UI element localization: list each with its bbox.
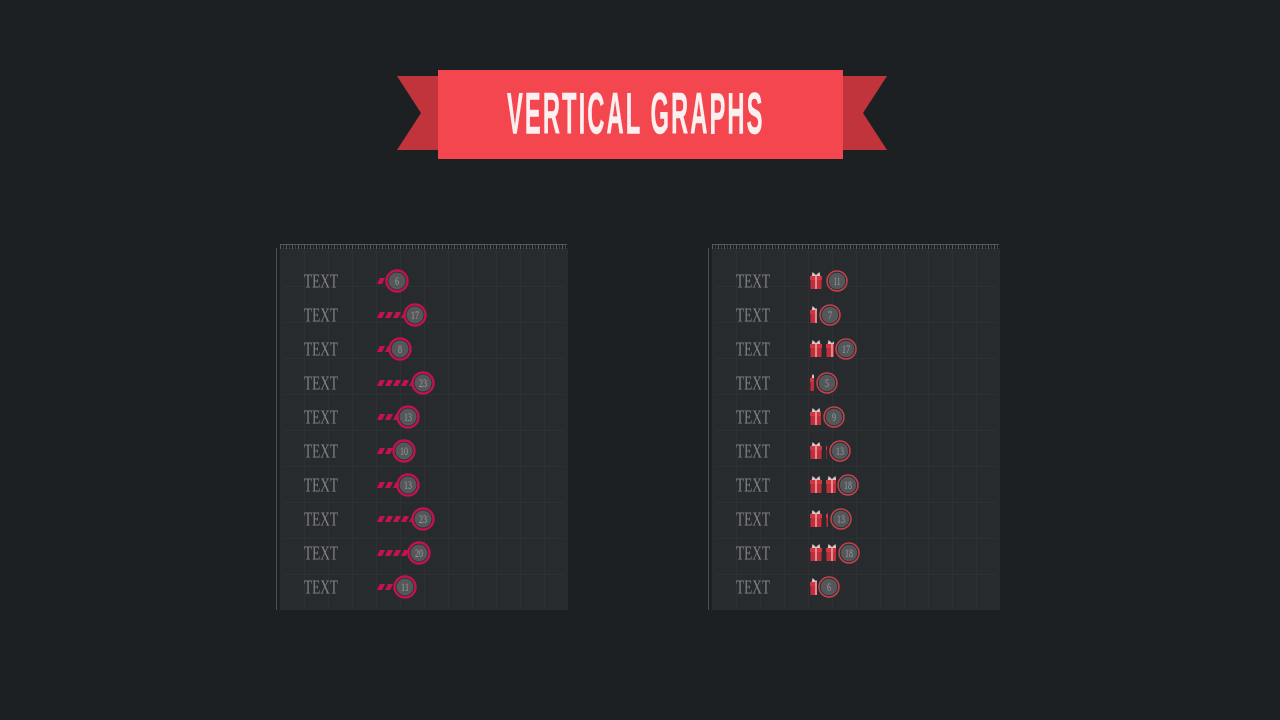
row 7 xyxy=(736,474,858,496)
banner left tail xyxy=(397,76,438,150)
top ruler xyxy=(280,244,567,249)
banner body xyxy=(438,70,843,159)
row 9: 20 xyxy=(415,546,423,560)
row 10: 6 xyxy=(827,580,831,594)
row 2: TEXT xyxy=(304,304,338,326)
panel grid xyxy=(284,250,564,610)
row 10: TEXT xyxy=(736,576,770,598)
row 4: TEXT xyxy=(736,372,770,394)
row 5: TEXT xyxy=(304,406,338,428)
panel grid xyxy=(716,250,996,610)
row 3: 8 xyxy=(398,342,402,356)
row 3 xyxy=(736,338,856,360)
row 8 xyxy=(304,508,434,530)
title: VERTICAL GRAPHS xyxy=(507,82,765,147)
row 6: TEXT xyxy=(304,440,338,462)
row 2: 7 xyxy=(828,308,832,322)
row 5: 13 xyxy=(404,410,412,424)
row 8: TEXT xyxy=(304,508,338,530)
row 10: TEXT xyxy=(304,576,338,598)
row 9 xyxy=(304,542,430,564)
row 1 xyxy=(736,270,847,292)
row 10: 11 xyxy=(401,580,409,594)
row 9: TEXT xyxy=(304,542,338,564)
row 2: TEXT xyxy=(736,304,770,326)
row 10 xyxy=(304,576,416,598)
row 6 xyxy=(304,440,414,462)
row 4: 5 xyxy=(825,376,829,390)
row 3: TEXT xyxy=(304,338,338,360)
row 3: TEXT xyxy=(736,338,770,360)
row 7: TEXT xyxy=(736,474,770,496)
row 8: 23 xyxy=(419,512,427,526)
row 1: 6 xyxy=(395,274,399,288)
title banner xyxy=(397,70,887,159)
row 2: 17 xyxy=(411,308,419,322)
row 1: TEXT xyxy=(304,270,338,292)
row 4: TEXT xyxy=(304,372,338,394)
top ruler xyxy=(712,244,999,249)
row 10 xyxy=(736,576,839,598)
row 9: 18 xyxy=(845,546,853,560)
row 6: 13 xyxy=(836,444,844,458)
panel background xyxy=(712,248,1000,610)
row 4: 23 xyxy=(419,376,427,390)
row 5 xyxy=(736,406,844,428)
row 6: TEXT xyxy=(736,440,770,462)
panel: striped bar graph xyxy=(276,244,568,610)
row 3: 17 xyxy=(842,342,850,356)
row 9: TEXT xyxy=(736,542,770,564)
row 8: TEXT xyxy=(736,508,770,530)
row 2 xyxy=(304,304,426,326)
row 7: 13 xyxy=(404,478,412,492)
left axis line xyxy=(708,248,709,610)
row 4 xyxy=(736,372,837,394)
row 5 xyxy=(304,406,418,428)
left axis line xyxy=(276,248,277,610)
banner right tail xyxy=(843,76,887,150)
row 8: 13 xyxy=(837,512,845,526)
row 9 xyxy=(736,542,859,564)
row 5: TEXT xyxy=(736,406,770,428)
row 1 xyxy=(304,270,408,292)
row 5: 9 xyxy=(832,410,836,424)
row 1: TEXT xyxy=(736,270,770,292)
panel background xyxy=(280,248,568,610)
row 3 xyxy=(304,338,410,360)
row 1: 11 xyxy=(834,274,840,288)
row 2 xyxy=(736,304,840,326)
row 6: 10 xyxy=(400,444,408,458)
row 6 xyxy=(736,440,850,462)
row 8 xyxy=(736,508,851,530)
panel: gift pictogram graph xyxy=(708,244,1000,610)
row 4 xyxy=(304,372,434,394)
row 7: 18 xyxy=(844,478,852,492)
row 7: TEXT xyxy=(304,474,338,496)
row 7 xyxy=(304,474,418,496)
